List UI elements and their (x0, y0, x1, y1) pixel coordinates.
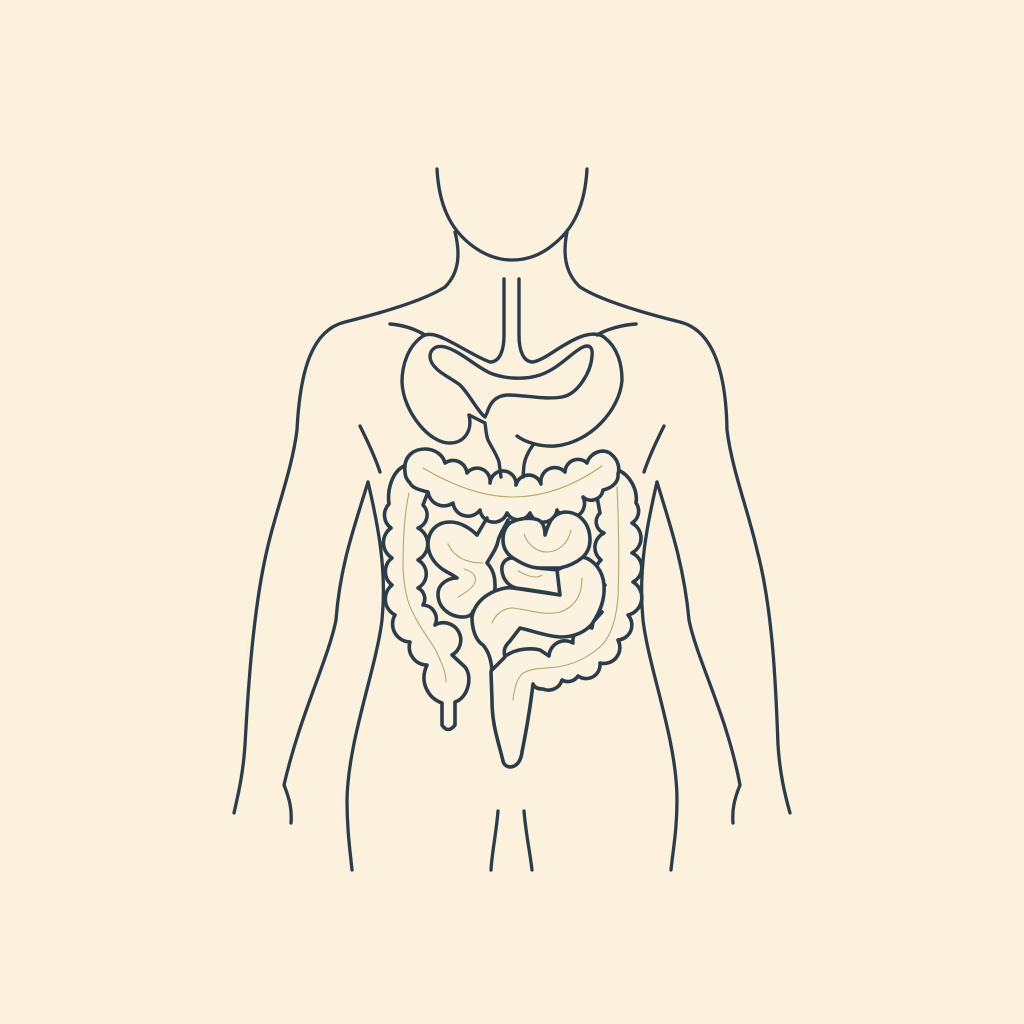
left loop lower line (458, 569, 475, 597)
large intestine (383, 449, 642, 767)
right torso side (642, 482, 677, 870)
esophagus and left liver outline (402, 279, 504, 443)
left loop upper line (448, 544, 483, 563)
esophagus and right stomach outline (517, 279, 622, 446)
right armpit line (644, 426, 664, 472)
left torso side (347, 482, 383, 870)
small intestine (428, 512, 604, 670)
groin lines (491, 811, 532, 870)
gold centre lines (403, 466, 619, 700)
lower sausage loop (502, 558, 560, 595)
inner stomach (430, 346, 592, 417)
descending colon line (513, 487, 619, 700)
left loop (428, 520, 508, 617)
neck and left shoulder and outer arm (234, 232, 458, 813)
right clavicle line (597, 324, 636, 335)
head and chin (437, 169, 587, 260)
left inner arm (284, 482, 368, 823)
right inner arm (657, 482, 740, 823)
connector to transverse colon (477, 518, 487, 535)
large lower loop (472, 557, 604, 670)
transverse colon line (423, 466, 602, 497)
heart loop line (524, 530, 571, 552)
ascending colon and appendix (383, 466, 469, 730)
ascending colon line (403, 493, 446, 682)
neck and right shoulder and outer arm (565, 232, 790, 813)
descending colon and sigmoid (491, 470, 642, 767)
right duodenum (523, 445, 533, 477)
large loop line (492, 578, 582, 623)
left clavicle line (390, 324, 425, 335)
body outline (234, 169, 790, 870)
sausage loop line (518, 571, 542, 577)
transverse colon (405, 449, 619, 522)
esophagus, liver and stomach (390, 279, 636, 477)
heart-shaped upper loop (503, 512, 590, 568)
left armpit line (360, 426, 380, 472)
left duodenum (469, 415, 501, 477)
